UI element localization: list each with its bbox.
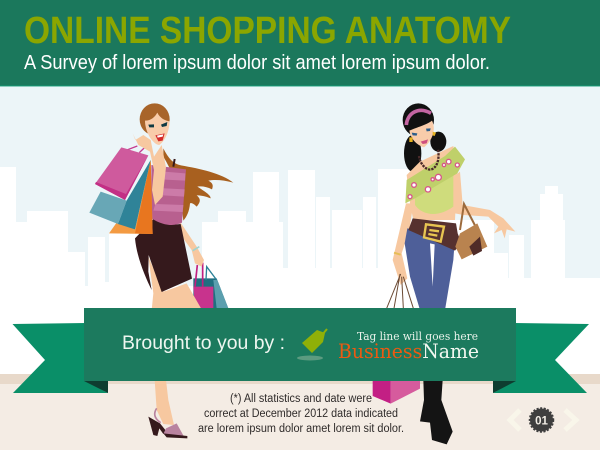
bare leg	[155, 380, 174, 425]
ribbon banner	[12, 308, 589, 393]
footnote: (*) All statistics and date were	[230, 393, 372, 405]
footnote: correct at December 2012 data indicated	[204, 408, 398, 420]
magenta bag	[95, 147, 148, 200]
left fold	[84, 381, 108, 393]
bag handles in hand	[387, 274, 413, 308]
pink shopping bag	[373, 380, 420, 404]
sky background	[0, 86, 600, 286]
footnote: are lorem ipsum dolor amet lorem sit dolor.	[198, 423, 404, 435]
floor	[0, 374, 600, 450]
woman with shopping bags	[89, 103, 233, 310]
lower bags	[193, 263, 228, 308]
orange bag	[109, 160, 153, 234]
legs	[148, 257, 202, 310]
bag handles	[125, 144, 148, 153]
woman with handbag	[387, 103, 515, 310]
handbag	[455, 204, 487, 259]
bracelet	[394, 253, 401, 255]
left ribbon tail	[12, 323, 108, 393]
icon: price tag	[297, 329, 327, 360]
belt	[408, 218, 461, 251]
business name: BusinessName	[338, 340, 479, 363]
banner panel	[84, 308, 516, 381]
skirt	[135, 218, 192, 292]
flowing hair	[163, 148, 233, 221]
head	[140, 103, 170, 145]
hair	[403, 103, 446, 172]
right fold	[493, 381, 516, 393]
headband	[406, 110, 431, 125]
bracelet	[193, 247, 199, 251]
next arrow	[565, 410, 576, 430]
brought to you by: Brought to you by :	[122, 333, 285, 354]
arm down	[178, 222, 204, 267]
teal bag	[89, 160, 151, 229]
heeled shoe	[148, 408, 187, 438]
previous arrow	[510, 410, 520, 430]
striped top	[151, 159, 186, 225]
raised arm and neck	[133, 133, 166, 205]
blouse	[405, 147, 465, 214]
page navigation	[510, 408, 576, 432]
leg and shoe below the banner	[148, 380, 187, 438]
subtitle: A Survey of lorem ipsum dolor sit amet lorem ipsum dolor.	[24, 52, 490, 74]
black boots	[420, 380, 453, 444]
shoulders and torso	[407, 146, 457, 220]
tag line: Tag line will goes here	[357, 329, 478, 343]
footnote	[198, 393, 404, 435]
city skyline	[0, 167, 600, 380]
right ribbon tail	[493, 323, 589, 393]
bag and boots below the banner	[373, 380, 453, 444]
jeans	[405, 228, 455, 310]
flowers	[408, 159, 459, 199]
right arm	[453, 172, 515, 238]
header band	[0, 0, 600, 87]
page number badge: 01	[535, 416, 548, 428]
necklace	[419, 149, 439, 170]
leg gap	[430, 243, 435, 287]
face	[409, 121, 436, 147]
left arm	[393, 203, 413, 285]
title: ONLINE SHOPPING ANATOMY	[24, 10, 511, 52]
